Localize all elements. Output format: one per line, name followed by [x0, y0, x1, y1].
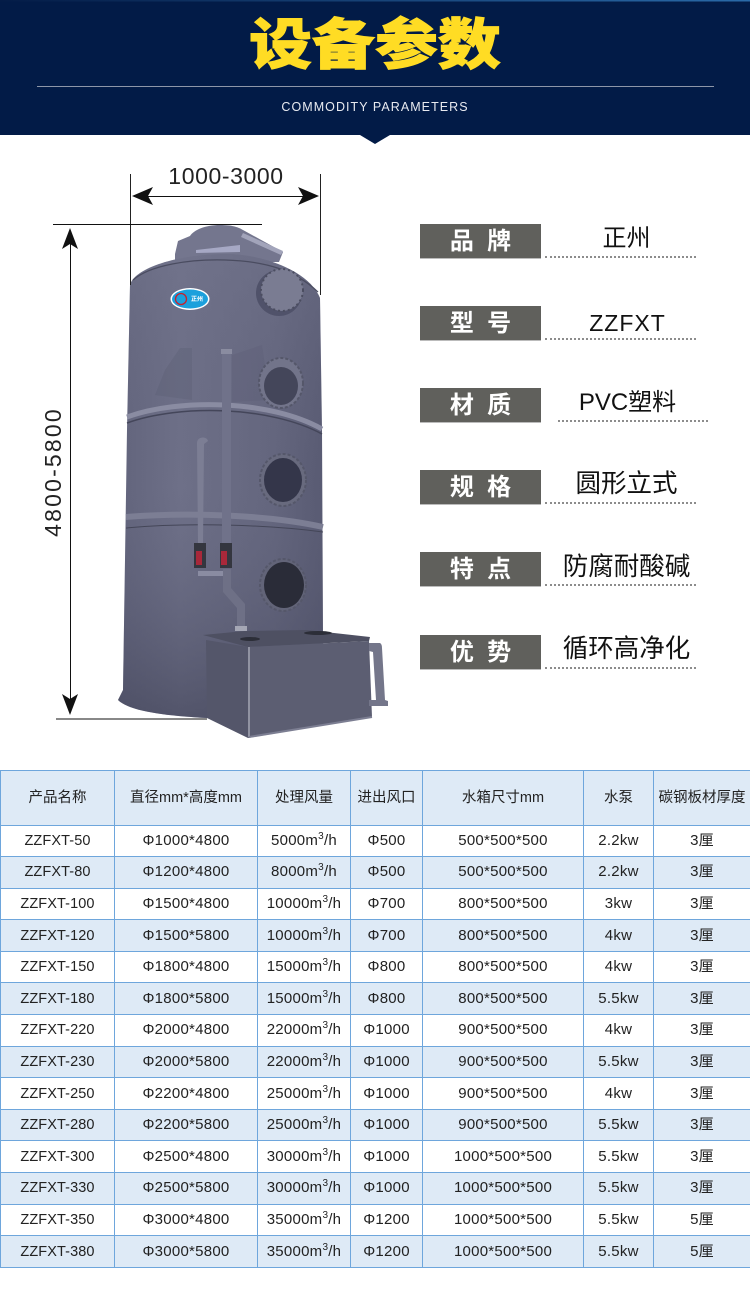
width dimension 1000-3000: 1000-3000 — [168, 163, 284, 189]
parameter table: 2.2kw — [598, 863, 639, 880]
spec: model — [420, 306, 696, 341]
parameter table: 直径mm*高度mm — [130, 790, 242, 806]
dotted line — [545, 256, 696, 258]
parameter table: 进出风口 — [358, 790, 416, 806]
parameter table: ZZFXT-300 — [20, 1149, 95, 1165]
parameter table: Φ1200 — [363, 1243, 410, 1260]
logo badge — [170, 288, 210, 310]
parameter table: ZZFXT-100 — [20, 896, 95, 912]
parameter table: Φ2500*4800 — [142, 1148, 230, 1165]
parameter table: 5000m3/h — [271, 831, 337, 849]
parameter table: Φ1000 — [363, 1148, 410, 1165]
parameter table: 5.5kw — [598, 1148, 639, 1165]
parameter table: Φ1000 — [363, 1085, 410, 1102]
parameter table: 4kw — [605, 1085, 632, 1102]
parameter table: Φ2500*5800 — [142, 1179, 230, 1196]
parameter table: Φ800 — [368, 990, 406, 1007]
parameter table: 5厘 — [690, 1211, 714, 1228]
parameter table: 800*500*500 — [458, 990, 548, 1007]
value: ZZFXT — [589, 310, 666, 336]
parameter table: Φ1000 — [363, 1053, 410, 1070]
parameter table: ZZFXT-150 — [20, 959, 95, 975]
parameter table: 5.5kw — [598, 990, 639, 1007]
parameter table: Φ1500*4800 — [142, 895, 230, 912]
value: 防腐耐酸碱 — [563, 553, 690, 581]
value: 圆形立式 — [575, 470, 678, 498]
parameter table: 4kw — [605, 1021, 632, 1038]
parameter table: 25000m3/h — [267, 1084, 341, 1102]
dotted line — [545, 338, 696, 340]
parameter table: ZZFXT-280 — [20, 1117, 95, 1133]
spec: material — [420, 388, 708, 423]
parameter table: 3厘 — [690, 927, 714, 944]
parameter table: 3厘 — [690, 1148, 714, 1165]
product diagram: tower with dimensions — [40, 163, 388, 738]
value: PVC塑料 — [579, 389, 676, 416]
banner background — [0, 0, 750, 144]
dotted line — [545, 667, 696, 669]
parameter table: 产品名称 — [28, 790, 86, 806]
label: 规 格 — [450, 474, 511, 501]
parameter table: Φ2200*5800 — [142, 1116, 230, 1133]
label — [420, 224, 541, 259]
parameter table: Φ1200*4800 — [142, 863, 230, 880]
parameter table: Φ500 — [368, 863, 406, 880]
parameter table: Φ3000*4800 — [142, 1211, 230, 1228]
parameter table: 10000m3/h — [267, 894, 341, 912]
parameter table: 碳钢板材厚度 — [658, 790, 746, 806]
parameter table: 22000m3/h — [267, 1020, 341, 1038]
parameter table: Φ1000 — [363, 1179, 410, 1196]
parameter table: 3厘 — [690, 1179, 714, 1196]
spec: advantage — [420, 635, 696, 670]
parameter table: 3kw — [605, 895, 632, 912]
parameter table: 2.2kw — [598, 832, 639, 849]
label: 型 号 — [450, 310, 511, 337]
parameter table: 水箱尺寸mm — [462, 790, 544, 806]
parameter table: 1000*500*500 — [454, 1148, 552, 1165]
parameter table: ZZFXT-50 — [24, 833, 91, 849]
parameter table: 5厘 — [690, 1243, 714, 1260]
parameter table: Φ700 — [368, 895, 406, 912]
parameter table: 25000m3/h — [267, 1115, 341, 1133]
parameter table: Φ2000*5800 — [142, 1053, 230, 1070]
parameter table: Φ1800*5800 — [142, 990, 230, 1007]
parameter table: ZZFXT-120 — [20, 928, 95, 944]
flanges — [256, 269, 306, 611]
dotted line — [558, 420, 708, 422]
parameter table: ZZFXT-220 — [20, 1022, 95, 1038]
label: 特 点 — [450, 556, 511, 583]
tower body — [118, 225, 325, 718]
parameter table: Φ1200 — [363, 1211, 410, 1228]
label: 优 势 — [450, 639, 511, 666]
parameter table: 15000m3/h — [267, 957, 341, 975]
parameter table: 4kw — [605, 927, 632, 944]
header banner — [0, 0, 750, 144]
parameter table: 800*500*500 — [458, 958, 548, 975]
parameter table: 10000m3/h — [267, 926, 341, 944]
parameter table: 500*500*500 — [458, 832, 548, 849]
parameter table: 3厘 — [690, 1116, 714, 1133]
label: 材 质 — [450, 392, 511, 419]
parameter table: 500*500*500 — [458, 863, 548, 880]
parameter table: 5.5kw — [598, 1053, 639, 1070]
parameter table: Φ1000*4800 — [142, 832, 230, 849]
parameter table: 5.5kw — [598, 1116, 639, 1133]
parameter table: Φ1000 — [363, 1021, 410, 1038]
title: 设备参数 — [249, 0, 501, 80]
parameter table: 1000*500*500 — [454, 1243, 552, 1260]
water tank — [203, 630, 388, 738]
value: 循环高净化 — [563, 635, 690, 663]
parameter table: Φ700 — [368, 927, 406, 944]
height dimension 4800-5800 — [40, 224, 262, 719]
parameter table: Φ1000 — [363, 1116, 410, 1133]
parameter table: 35000m3/h — [267, 1210, 341, 1228]
parameter table: Φ2200*4800 — [142, 1085, 230, 1102]
parameter table: 22000m3/h — [267, 1052, 341, 1070]
parameter table: 15000m3/h — [267, 989, 341, 1007]
parameter table: 5.5kw — [598, 1243, 639, 1260]
dotted line — [545, 502, 696, 504]
parameter table: 5.5kw — [598, 1179, 639, 1196]
parameter table: 3厘 — [690, 1021, 714, 1038]
parameter table: 30000m3/h — [267, 1147, 341, 1165]
subtitle: COMMODITY PARAMETERS — [281, 100, 469, 114]
parameter table: ZZFXT-350 — [20, 1212, 95, 1228]
parameter table: 1000*500*500 — [454, 1211, 552, 1228]
label: 品 牌 — [450, 228, 511, 255]
parameter table: 3厘 — [690, 1053, 714, 1070]
label — [420, 470, 541, 505]
parameter table: 800*500*500 — [458, 927, 548, 944]
parameter table: Φ3000*5800 — [142, 1243, 230, 1260]
spec: form — [420, 470, 696, 505]
value: 正州 — [602, 225, 650, 252]
parameter table: ZZFXT-330 — [20, 1180, 95, 1196]
parameter table: ZZFXT-180 — [20, 991, 95, 1007]
spec: brand — [420, 224, 696, 259]
label — [420, 635, 541, 670]
parameter table: ZZFXT-380 — [20, 1244, 95, 1260]
parameter table: Φ500 — [368, 832, 406, 849]
logo badge: 正州 — [191, 296, 203, 303]
parameter table: 4kw — [605, 958, 632, 975]
parameter table: ZZFXT-230 — [20, 1054, 95, 1070]
parameter table: 3厘 — [690, 958, 714, 975]
parameter table: 3厘 — [690, 863, 714, 880]
height dimension 4800-5800: 4800-5800 — [40, 407, 66, 537]
parameter table — [0, 770, 750, 1268]
parameter table: 3厘 — [690, 895, 714, 912]
parameter table: 5.5kw — [598, 1211, 639, 1228]
spec: feature — [420, 552, 696, 587]
parameter table: 30000m3/h — [267, 1178, 341, 1196]
parameter table: 3厘 — [690, 990, 714, 1007]
dotted line — [545, 584, 696, 586]
parameter table: 3厘 — [690, 1085, 714, 1102]
label — [420, 388, 541, 423]
parameter table: Φ800 — [368, 958, 406, 975]
parameter table: 1000*500*500 — [454, 1179, 552, 1196]
pipes and valves — [194, 349, 247, 631]
label — [420, 306, 541, 341]
label — [420, 552, 541, 587]
parameter table: 900*500*500 — [458, 1085, 548, 1102]
parameter table: Φ1500*5800 — [142, 927, 230, 944]
parameter table: ZZFXT-80 — [24, 864, 91, 880]
parameter table: 8000m3/h — [271, 862, 337, 880]
parameter table: Φ1800*4800 — [142, 958, 230, 975]
parameter table: 水泵 — [604, 790, 633, 806]
parameter table: 900*500*500 — [458, 1021, 548, 1038]
parameter table: Φ2000*4800 — [142, 1021, 230, 1038]
parameter table: 800*500*500 — [458, 895, 548, 912]
parameter table: 900*500*500 — [458, 1053, 548, 1070]
parameter table: 处理风量 — [275, 790, 333, 806]
parameter table: 3厘 — [690, 832, 714, 849]
parameter table: 35000m3/h — [267, 1242, 341, 1260]
parameter table: ZZFXT-250 — [20, 1086, 95, 1102]
parameter table: 900*500*500 — [458, 1116, 548, 1133]
width dimension 1000-3000 — [130, 163, 320, 295]
